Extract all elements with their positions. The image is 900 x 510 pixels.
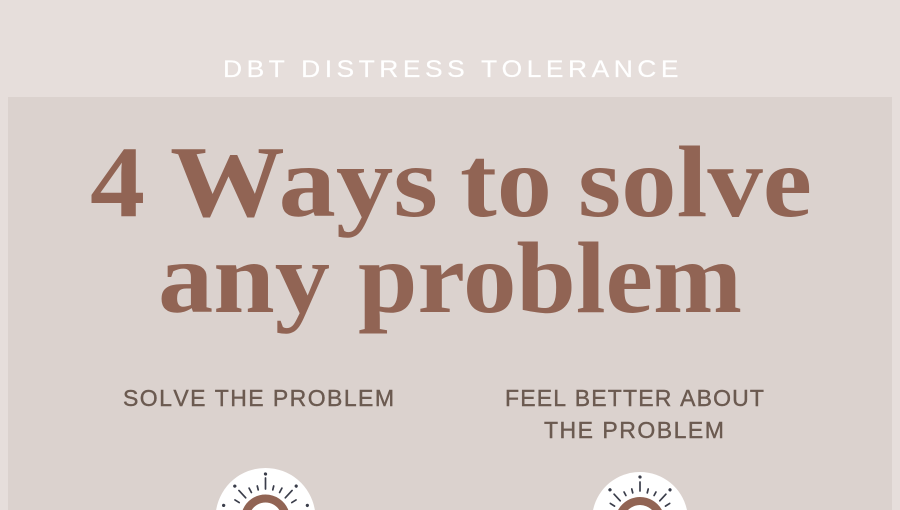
subheading: feel better about the problem: THE PROBLEM: [544, 417, 725, 443]
title: [90, 126, 812, 335]
title: to: [460, 126, 552, 239]
title: 4: [90, 126, 145, 239]
subheading: feel better about the problem: [505, 385, 765, 443]
header label: DBT DISTRESS TOLERANCE: [223, 56, 683, 83]
icon: sun badge right: [593, 472, 687, 510]
subheading: solve the problem: SOLVE THE PROBLEM: [123, 385, 395, 411]
title: Ways: [170, 126, 438, 239]
panel: main content: [8, 97, 892, 510]
title: any: [158, 222, 330, 335]
subheading: feel better about the problem: FEEL BETTER ABOUT: [505, 385, 765, 411]
title: problem: [358, 222, 742, 335]
icon: sun badge left: [216, 468, 315, 510]
title: solve: [578, 126, 812, 239]
